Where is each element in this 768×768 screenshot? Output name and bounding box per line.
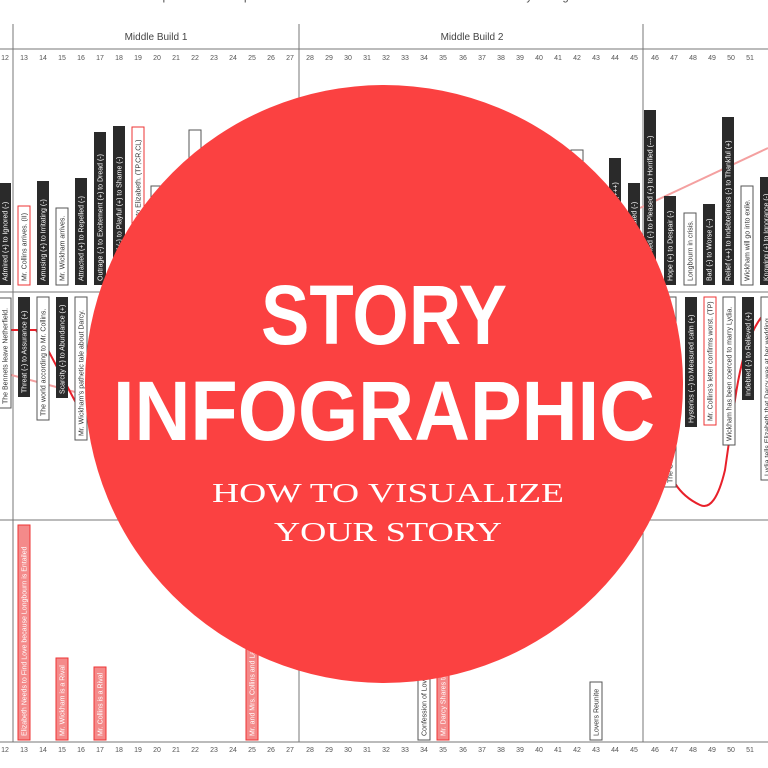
column numbers top: 29 (325, 55, 333, 62)
lower scene cards: Scarcity (-) to Abundance (+) (60, 305, 66, 394)
column numbers top: 26 (267, 55, 275, 62)
upper scene cards: Amusing (+) to Irritating (-) (40, 199, 48, 281)
column numbers top: 19 (134, 55, 142, 62)
lower scene cards: The world according to Mr. Collins. (40, 309, 48, 416)
column numbers bottom: 29 (325, 747, 333, 754)
column numbers top: 41 (554, 55, 562, 62)
column numbers bottom: 46 (651, 747, 659, 754)
column numbers bottom: 17 (96, 747, 104, 754)
column numbers bottom: 26 (267, 747, 275, 754)
column numbers bottom: 38 (497, 747, 505, 754)
obstacle / conflict bars (18, 525, 602, 740)
obstacle / conflict bars: Lovers Reunite (594, 689, 600, 736)
column numbers bottom: 22 (191, 747, 199, 754)
column numbers bottom: 33 (401, 747, 409, 754)
column numbers bottom: 35 (439, 747, 447, 754)
lower scene cards: Indebted (-) to Relieved (+) (746, 312, 752, 396)
upper scene cards: Humiliated (-) to Playful (+) to Shame (-) (116, 157, 124, 281)
subtitle: HOW TO VISUALIZE (212, 478, 564, 508)
lower scene cards: Threat (-) to Assurance (+) (22, 311, 28, 393)
column numbers top: 50 (727, 55, 735, 62)
column numbers bottom: 48 (689, 747, 697, 754)
upper scene cards: Mr. Collins arrives. (II) (22, 213, 28, 281)
obstacle / conflict bars: Mr. Collins is a Rival (98, 673, 104, 736)
column numbers bottom: 14 (39, 747, 47, 754)
title: STORY (261, 268, 507, 362)
column numbers top: 21 (172, 55, 180, 62)
lower scene cards: Hysterics (--) to Measured calm (+) (688, 315, 696, 423)
column numbers bottom: 20 (153, 747, 161, 754)
column numbers bottom: 31 (363, 747, 371, 754)
section headings: Middle Build 2 (441, 32, 504, 43)
column numbers top: 12 (1, 55, 9, 62)
upper scene cards: Mr. Wickham arrives. (60, 216, 66, 281)
column numbers top: 23 (210, 55, 218, 62)
upper scene cards: Attracted (+) to Repelled (-) (78, 196, 86, 281)
obstacle / conflict bars: Mr. Darcy Shares the Truth (440, 652, 448, 736)
upper scene cards: Mr. Collins proposes to Elizabeth. (TP,CR,CL) (136, 140, 142, 281)
column numbers bottom: 47 (670, 747, 678, 754)
column numbers bottom (1, 747, 754, 754)
column numbers top: 32 (382, 55, 390, 62)
column numbers top: 17 (96, 55, 104, 62)
column numbers bottom: 51 (746, 747, 754, 754)
column numbers top: 22 (191, 55, 199, 62)
column numbers bottom: 43 (592, 747, 600, 754)
column numbers bottom: 34 (420, 747, 428, 754)
column numbers bottom: 21 (172, 747, 180, 754)
upper scene cards: Hope (+) to Despair (-) (668, 211, 674, 281)
column numbers bottom: 18 (115, 747, 123, 754)
column numbers bottom: 16 (77, 747, 85, 754)
lower scene cards: The Gardiners take Elizabeth home. (668, 371, 674, 483)
column numbers top: 16 (77, 55, 85, 62)
lower scene cards: Wickham has been coerced to marry Lydia. (726, 307, 734, 441)
lower scene cards: Mr. Wickham's pathetic tale about Darcy. (78, 310, 86, 436)
column numbers top: 13 (20, 55, 28, 62)
upper scene cards (0, 110, 768, 285)
column numbers top: 24 (229, 55, 237, 62)
column numbers top: 20 (153, 55, 161, 62)
column numbers bottom: 13 (20, 747, 28, 754)
obstacle / conflict bars: Confession of Love (422, 676, 428, 736)
lower scene cards (0, 297, 768, 487)
column numbers top: 51 (746, 55, 754, 62)
column numbers top: 14 (39, 55, 47, 62)
column numbers top: 31 (363, 55, 371, 62)
column numbers top: 37 (478, 55, 486, 62)
upper scene cards: Admired (+) to Ignored (-) (2, 202, 10, 281)
red circle badge (85, 85, 683, 683)
subtitle: YOUR STORY (274, 517, 502, 547)
column numbers top: 18 (115, 55, 123, 62)
column numbers top: 43 (592, 55, 600, 62)
column numbers bottom: 49 (708, 747, 716, 754)
obstacle / conflict bars: Mr. and Mrs. Collins and Lady Catherine (250, 611, 256, 736)
column numbers top: 47 (670, 55, 678, 62)
column numbers bottom: 27 (286, 747, 294, 754)
column numbers bottom: 42 (573, 747, 581, 754)
upper scene cards: Elizabeth visits Pemberley. (574, 198, 582, 281)
upper scene cards: Wickham will go into exile. (744, 199, 752, 281)
column numbers bottom: 15 (58, 747, 66, 754)
column numbers top: 25 (248, 55, 256, 62)
column numbers bottom: 19 (134, 747, 142, 754)
obstacle / conflict bars: Elizabeth Needs to Find Love because Longbourn is Entailed (22, 546, 28, 736)
column numbers top: 40 (535, 55, 543, 62)
column numbers top: 48 (689, 55, 697, 62)
upper scene cards: Caroline writes to Jane. (154, 208, 162, 281)
column numbers bottom: 32 (382, 747, 390, 754)
upper scene cards: Outrage (-) to Excitement (+) to Dread (-) (98, 154, 104, 281)
section headings (125, 32, 504, 43)
section headings: Middle Build 1 (125, 32, 188, 43)
column numbers bottom: 36 (459, 747, 467, 754)
title: INFOGRAPHIC (113, 364, 655, 458)
story arc lines (0, 148, 768, 506)
column numbers bottom: 28 (306, 747, 314, 754)
column numbers bottom: 50 (727, 747, 735, 754)
column numbers top: 36 (459, 55, 467, 62)
column numbers bottom: 12 (1, 747, 9, 754)
column numbers bottom: 39 (516, 747, 524, 754)
column numbers top: 46 (651, 55, 659, 62)
column numbers bottom: 24 (229, 747, 237, 754)
column numbers top: 44 (611, 55, 619, 62)
column numbers bottom: 37 (478, 747, 486, 754)
column numbers bottom: 25 (248, 747, 256, 754)
column numbers top: 15 (58, 55, 66, 62)
column numbers bottom: 23 (210, 747, 218, 754)
column numbers bottom: 41 (554, 747, 562, 754)
upper scene cards: Relief (++) to Indebtedness (-) to Thankful (+) (726, 140, 732, 281)
upper scene cards: Content (+) to Agitated (-) (632, 202, 638, 281)
column numbers top: 39 (516, 55, 524, 62)
upper scene cards: Bad (-) to Worse (--) (706, 218, 714, 281)
subtitle (212, 478, 564, 547)
column numbers top: 28 (306, 55, 314, 62)
upper scene cards: Disappointed (-) to Pleased (+) to Horrified (---) (648, 136, 654, 281)
column numbers top: 33 (401, 55, 409, 62)
column numbers bottom: 30 (344, 747, 352, 754)
column numbers top: 30 (344, 55, 352, 62)
column numbers top: 42 (573, 55, 581, 62)
upper scene cards: Surprised (+) to Delighted (+++) (612, 182, 620, 281)
upper scene cards: Longbourn in crisis. (688, 220, 694, 281)
column numbers top: 34 (420, 55, 428, 62)
column numbers top: 35 (439, 55, 447, 62)
column numbers top: 45 (630, 55, 638, 62)
column numbers top: 38 (497, 55, 505, 62)
column numbers bottom: 45 (630, 747, 638, 754)
upper scene cards: Charlotte accepts Mr. Collins. (192, 190, 200, 281)
column numbers top: 49 (708, 55, 716, 62)
column numbers bottom: 44 (611, 747, 619, 754)
title (113, 268, 655, 458)
lower scene cards: Mr. Collins's letter confirms worst. (TP) (708, 301, 714, 421)
obstacle / conflict bars: Mr. Wickham is a Rival (60, 665, 66, 736)
column numbers bottom: 40 (535, 747, 543, 754)
column numbers top: 27 (286, 55, 294, 62)
lower scene cards: The Bennets leave Netherfield. (2, 308, 10, 404)
column numbers top (1, 55, 754, 62)
